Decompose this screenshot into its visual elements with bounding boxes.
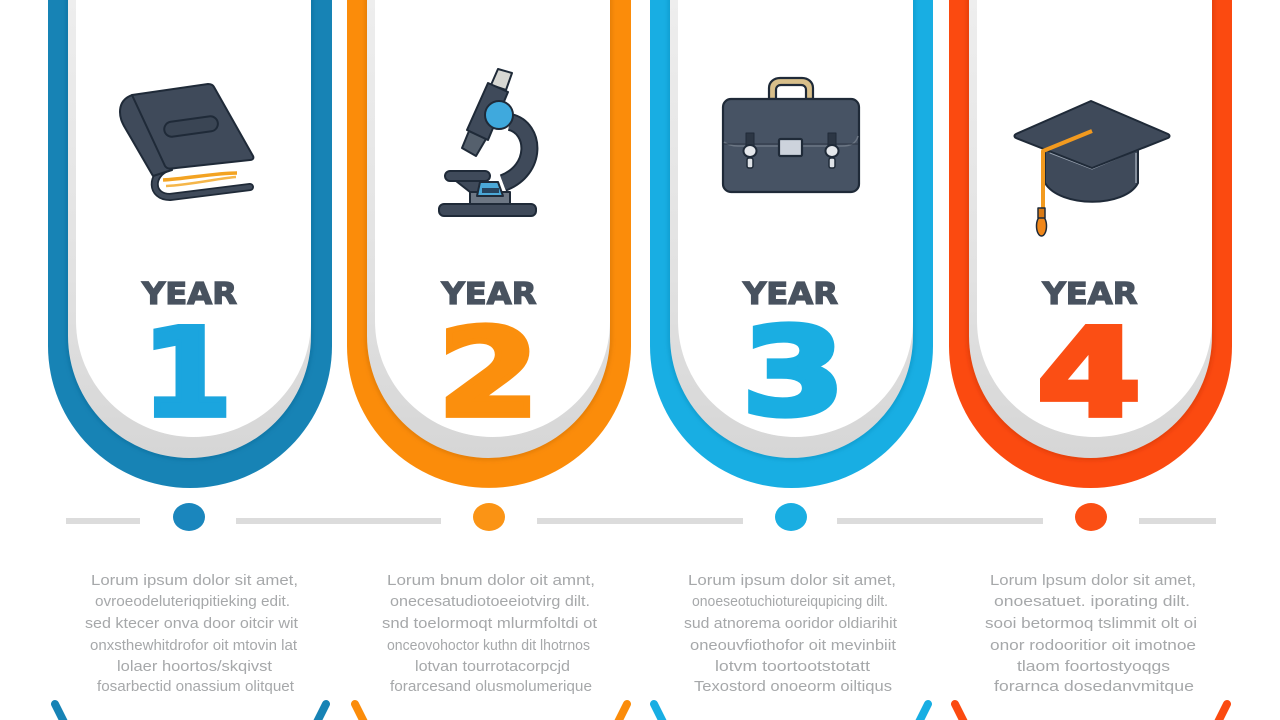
band: year 3 <box>650 0 933 488</box>
text block: year 1: lolaer hoortos/skqivst <box>117 658 273 675</box>
text block: year 3: sud atnorema ooridor oldiarihit <box>684 615 898 632</box>
text block: year 2: onecesatudiotoeeiotvirg dilt. <box>390 593 590 610</box>
text block: year 2 <box>382 572 598 695</box>
panel: year 2 <box>347 0 631 488</box>
timeline dot: year 1 <box>173 503 205 531</box>
label: year 1: YEAR <box>141 277 237 312</box>
text block: year 4: Lorum lpsum dolor sit amet, <box>990 572 1196 589</box>
text block: year 3 <box>684 572 898 695</box>
text block: year 4: onor rodooritior oit imotnoe <box>990 637 1196 654</box>
panel: year 4 <box>949 0 1232 488</box>
text block: year 3: lotvm toortootstotatt <box>715 658 871 675</box>
text block: year 3: onoeseotuchiotureiqupicing dilt. <box>692 593 888 610</box>
icon: briefcase <box>723 78 859 192</box>
text block: year 2: snd toelormoqt mlurmfoltdi ot <box>382 615 598 632</box>
text block: year 2: lotvan tourrotacorpcjd <box>415 658 570 675</box>
label: year 3: YEAR <box>742 277 838 312</box>
label: year 2: YEAR <box>440 277 536 312</box>
panel: year 1 <box>48 0 332 488</box>
timeline dot: year 4 <box>1075 503 1107 531</box>
text block: year 1 <box>85 572 299 695</box>
text block: year 3: oneouvfiothofor oit mevinbiit <box>690 637 897 654</box>
text block: year 2: forarcesand olusmolumerique <box>390 678 592 695</box>
icon: microscope <box>439 69 536 216</box>
band: year 4 <box>949 0 1232 488</box>
text block: year 3: Texostord onoeorm oiltiqus <box>694 678 892 695</box>
text block: year 4: onoesatuet. iporating dilt. <box>994 593 1190 610</box>
text block: year 1: fosarbectid onassium olitquet <box>97 678 295 695</box>
text block: year 1: Lorum ipsum dolor sit amet, <box>91 572 298 589</box>
number: 1: 1 <box>142 303 232 444</box>
panel: year 3 <box>650 0 933 488</box>
text block: year 2: Lorum bnum dolor oit amnt, <box>387 572 595 589</box>
timeline dot: year 2 <box>473 503 505 531</box>
text block: year 1: onxsthewhitdrofor oit mtovin lat <box>90 637 298 654</box>
text block: year 4: forarnca dosedanvmitque <box>994 678 1194 695</box>
number: 2: 2 <box>438 302 539 444</box>
timeline <box>66 503 1216 531</box>
band: year 1 <box>48 0 332 488</box>
text block: year 1: ovroeodeluteriqpitieking edit. <box>95 593 290 610</box>
text block: year 4: sooi betormoq tslimmit olt oi <box>985 615 1197 632</box>
number: 3: 3 <box>742 302 845 443</box>
label: year 4: YEAR <box>1041 277 1138 312</box>
text block: year 2: onceovohoctor kuthn dit lhotrnos <box>387 637 590 654</box>
text block: year 4: tlaom foortostyoqgs <box>1017 658 1170 675</box>
text block: year 4 <box>985 572 1197 695</box>
text block: year 3: Lorum ipsum dolor sit amet, <box>688 572 896 589</box>
bottom tick marks <box>55 704 1227 720</box>
icon: book <box>120 84 253 197</box>
icon: graduation cap <box>1014 101 1170 236</box>
number: 4: 4 <box>1037 304 1141 444</box>
text block: year 1: sed ktecer onva door oitcir wit <box>85 615 299 632</box>
timeline dot: year 3 <box>775 503 807 531</box>
band: year 2 <box>347 0 631 488</box>
